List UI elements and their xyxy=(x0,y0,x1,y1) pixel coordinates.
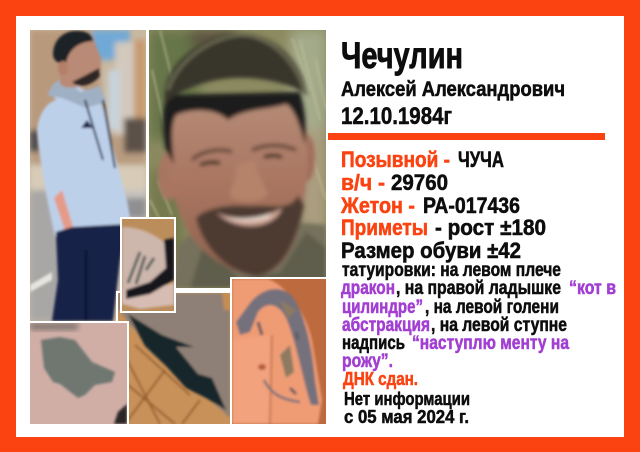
photo: hand tattoo xyxy=(28,321,129,426)
text block: tattoos description: абстракция xyxy=(342,315,430,336)
field: call sign: Позывной - xyxy=(341,147,450,172)
text block: tattoos description: , на правой ладышке xyxy=(396,278,561,299)
field: call sign: ЧУЧА xyxy=(458,147,504,172)
orange divider xyxy=(328,133,605,140)
text block: tattoos description xyxy=(341,260,616,372)
text block: tattoos description: дракон xyxy=(341,278,395,299)
text block: tattoos description: цилиндре” xyxy=(342,297,423,318)
text block: tattoos description: “кот в xyxy=(569,278,616,299)
field: shoe size: Размер обуви ±42 xyxy=(341,238,521,263)
text block: tattoos description: , на левой ступне xyxy=(431,315,567,336)
note: no information since date: Нет информации xyxy=(344,388,470,409)
note: no information since date xyxy=(344,388,470,427)
field: military unit: 29760 xyxy=(391,170,448,195)
photo: full-length man in white adidas jacket xyxy=(30,30,146,321)
photo: shoulder dragon tattoo xyxy=(230,277,326,426)
photo: foot with inscription tattoo xyxy=(120,217,176,313)
photo: smiling man in cap, portrait xyxy=(149,30,326,288)
note: DNA submitted: ДНК сдан. xyxy=(343,369,418,389)
text block: tattoos description: , на левой голени xyxy=(425,297,559,318)
photo: leg tattoo on wooden floor xyxy=(116,291,232,426)
field: height xyxy=(341,215,546,240)
field: height: - рост ±180 xyxy=(435,215,546,240)
field: tag number: Жетон - xyxy=(340,193,415,218)
field: military unit xyxy=(341,170,448,195)
heading: surname: Чечулин xyxy=(341,35,463,76)
text block: tattoos description: надпись xyxy=(342,333,405,354)
field: tag number: РА-017436 xyxy=(423,193,520,218)
field: tag number xyxy=(340,193,520,218)
text block: tattoos description: рожу”. xyxy=(342,351,393,372)
field: height: Приметы xyxy=(341,215,428,240)
text block: tattoos description: “наступлю менту на xyxy=(412,333,569,354)
heading: date of birth: 12.10.1984г xyxy=(341,103,452,130)
heading: given name and patronymic: Алексей Александрович xyxy=(341,78,565,101)
note: no information since date: с 05 мая 2024 г. xyxy=(344,406,469,427)
field: military unit: в/ч - xyxy=(341,170,385,195)
text block: tattoos description: татуировки: на левом плече xyxy=(342,260,561,281)
